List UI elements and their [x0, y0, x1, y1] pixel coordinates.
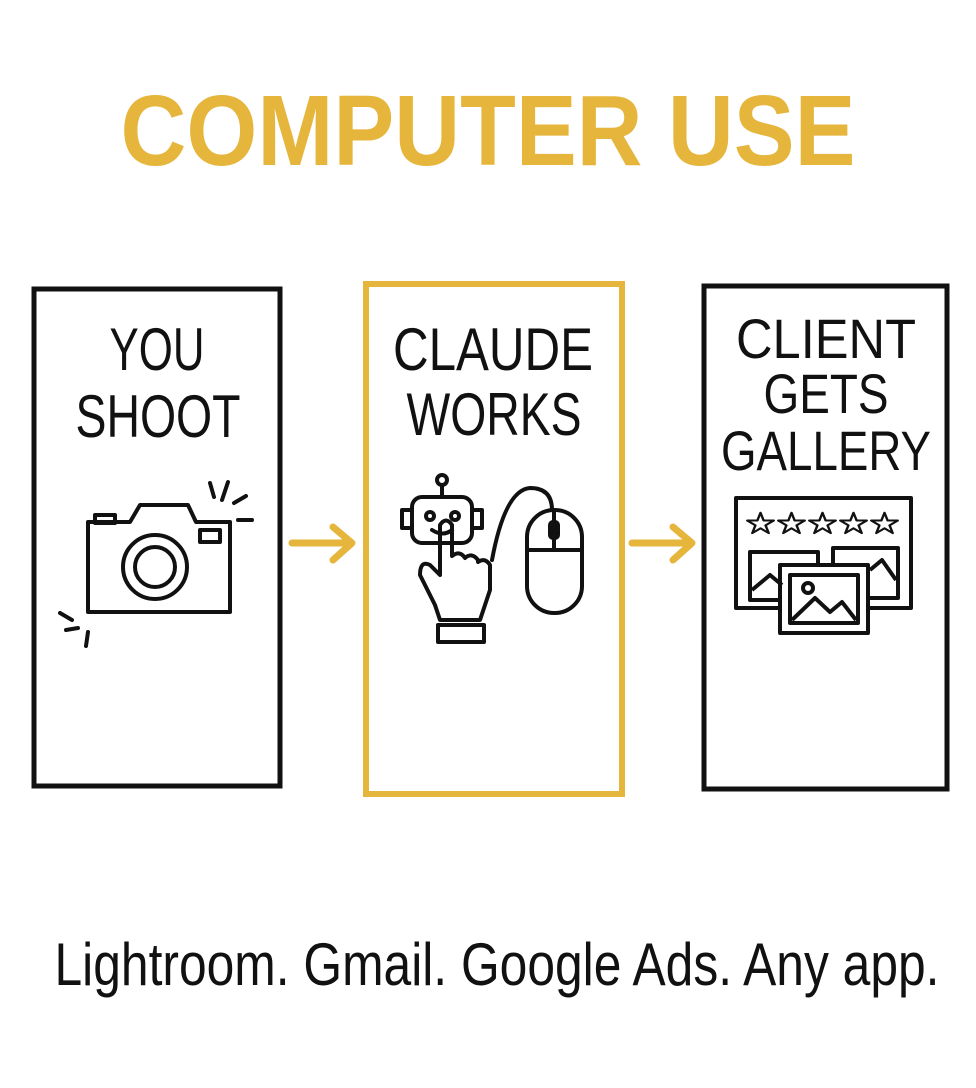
heading: claude works: CLAUDE: [393, 316, 593, 383]
heading: you shoot: YOU: [110, 316, 204, 383]
heading: client gets gallery: GETS: [764, 362, 888, 425]
arrow 1: [292, 527, 352, 560]
heading: you shoot: [76, 316, 240, 450]
panel: client gets gallery: [704, 286, 947, 789]
icon: camera: [60, 482, 252, 646]
icon: gallery: [736, 498, 911, 633]
panel: claude works: [366, 284, 622, 794]
panel: you shoot: [34, 289, 280, 786]
heading: you shoot: SHOOT: [76, 383, 240, 450]
heading: client gets gallery: CLIENT: [736, 307, 916, 370]
icon: gallery: ★★★★★: [745, 507, 900, 540]
icon: robot, hand, mouse: [402, 475, 582, 642]
heading: client gets gallery: GALLERY: [721, 419, 931, 482]
heading: client gets gallery: [721, 307, 931, 482]
heading: claude works: [393, 316, 593, 448]
arrow 2: [632, 527, 692, 560]
title: COMPUTER USE: [120, 75, 856, 187]
heading: claude works: WORKS: [406, 381, 582, 448]
